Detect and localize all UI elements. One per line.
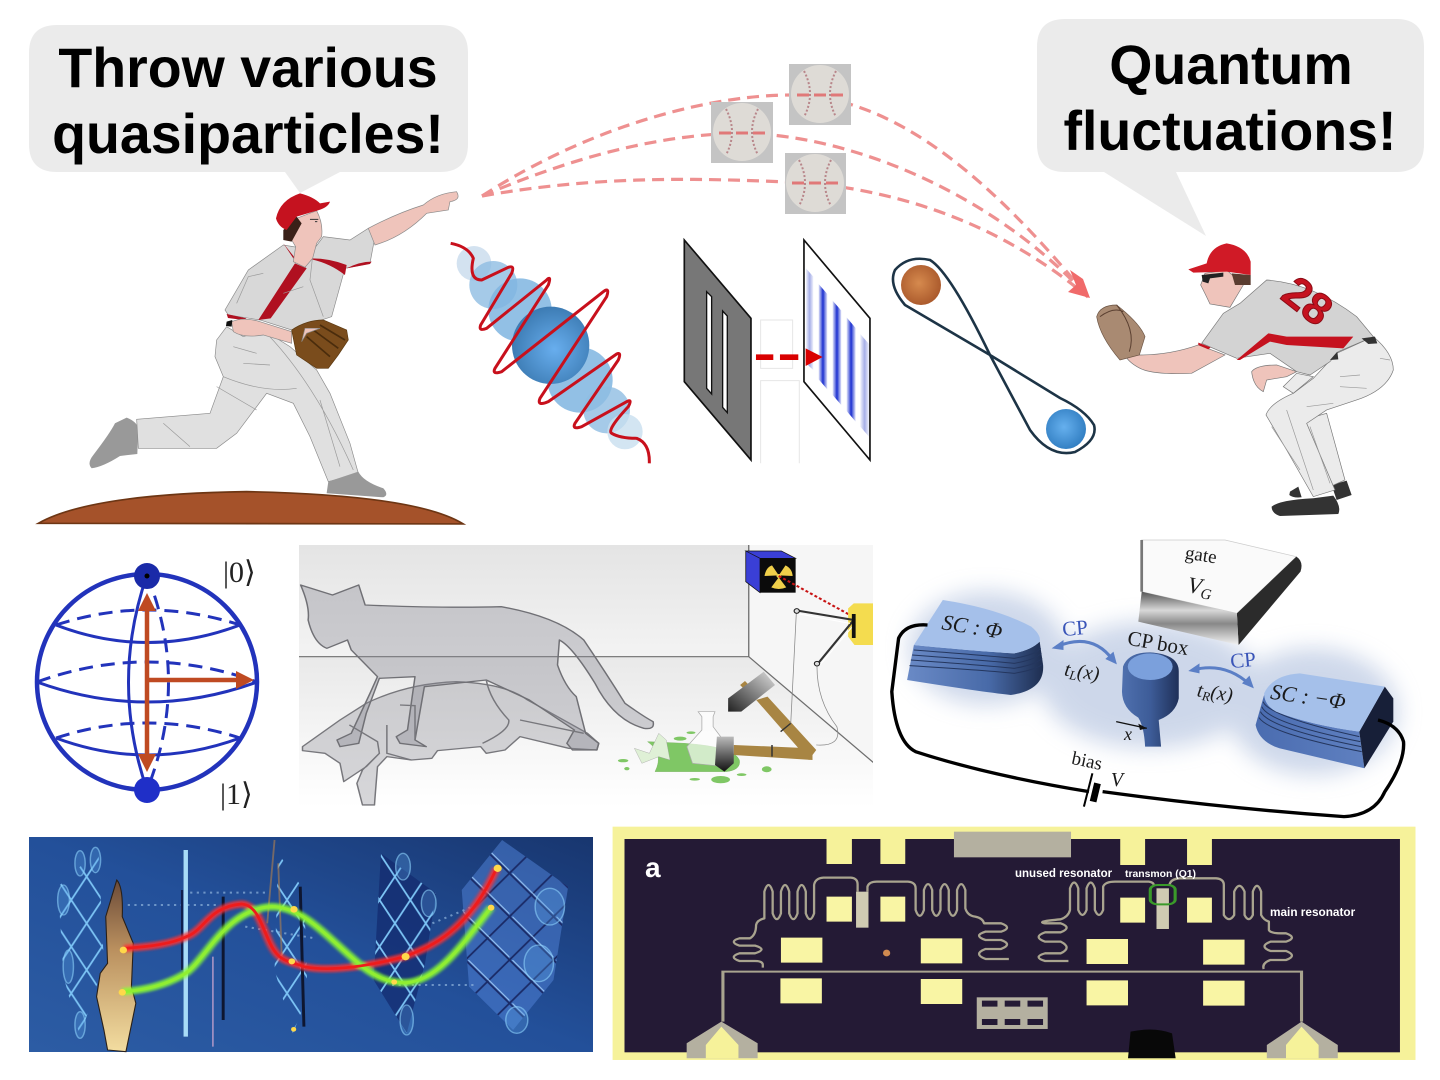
bond tabs (827, 832, 1212, 865)
CP box island (1116, 652, 1179, 747)
gate electrode (1138, 540, 1302, 645)
cat inner lines (349, 680, 584, 760)
pitcher figure (90, 192, 458, 497)
Bloch sphere (37, 556, 257, 811)
diagram labels: SC : Φ (940, 609, 1004, 644)
transmon chip micrograph (613, 827, 1415, 1060)
lattice lobes (58, 847, 564, 1038)
diagram labels: V (1186, 572, 1204, 599)
diagram labels (940, 543, 1348, 791)
Cooper pair box diagram (892, 540, 1404, 817)
speech bubble: throw various quasiparticles: quasiparticles! (52, 103, 444, 165)
diagram labels: CP (1061, 615, 1089, 641)
diagram labels: t (1063, 658, 1072, 681)
figure-eight trajectory with two balls (893, 259, 1095, 453)
diagram labels: R (1200, 688, 1211, 704)
meander resonators (734, 878, 1292, 969)
red wave (451, 243, 649, 463)
feedline (723, 972, 1302, 1022)
center test structure (977, 997, 1048, 1029)
Bloch sphere: |0⟩ (223, 556, 256, 589)
mound (38, 492, 463, 524)
dust spot (883, 950, 890, 956)
baseball 1 (789, 64, 851, 125)
hammer (734, 681, 816, 760)
gold plate (97, 880, 136, 1052)
dashed throw trajectories with arrow (482, 95, 1090, 298)
speech bubble: quantum fluctuations: Quantum (1109, 34, 1353, 96)
diagram labels: (x) (1209, 681, 1235, 707)
speech bubble: quantum fluctuations (1037, 19, 1424, 236)
chip labels: a (645, 852, 661, 883)
room lines (299, 545, 876, 765)
diagram labels: G (1199, 586, 1213, 604)
lying cat (302, 682, 599, 805)
interference screen (804, 240, 870, 460)
right superconductor (1256, 673, 1393, 768)
blue glow (909, 592, 1398, 775)
baseball 3 (785, 153, 846, 214)
pitcher on mound (38, 192, 463, 524)
chip labels (645, 852, 1356, 919)
green marker (1150, 885, 1175, 904)
speech bubble: throw various quasiparticles (29, 25, 468, 193)
coupling pads (780, 897, 1245, 1006)
radioactive box (746, 551, 796, 593)
green path (122, 907, 491, 992)
diagram labels: L (1067, 667, 1078, 683)
neon qubit paths through lattices (29, 837, 593, 1052)
diagram labels: gate (1184, 543, 1218, 568)
speech bubble: throw various quasiparticles: Throw various (58, 37, 438, 99)
glow (122, 868, 497, 992)
diagram labels: (x) (1076, 660, 1101, 686)
diagram labels: CP (1229, 647, 1257, 673)
glowing nodes (119, 865, 502, 1032)
diagram labels: bias (1070, 748, 1104, 775)
tunneling arrows (1057, 641, 1249, 684)
catcher: 28 (1273, 267, 1342, 336)
red path (124, 868, 497, 969)
diagram labels: CP box (1126, 626, 1191, 660)
detector and lever (848, 603, 873, 645)
chip labels: unused resonator (1015, 868, 1113, 880)
label plate (954, 832, 1071, 857)
red dashed arrow (756, 348, 823, 366)
wave packet with spheres (451, 243, 649, 463)
slit plate (684, 240, 751, 460)
chip labels: main resonator (1270, 905, 1356, 919)
right wall shade (750, 545, 873, 690)
speech bubble: quantum fluctuations: fluctuations! (1064, 100, 1396, 162)
circuit wire (892, 625, 1404, 817)
battery (1084, 773, 1092, 807)
diagram labels: x (1123, 724, 1132, 744)
transmon strips (856, 892, 868, 928)
catcher (1097, 243, 1393, 516)
baseball 2 (711, 102, 773, 163)
dotted tick rows (128, 893, 476, 985)
edge-on plates (180, 850, 192, 1037)
launch pads (687, 1022, 1338, 1058)
diagram labels: V (1111, 769, 1126, 791)
left superconductor (907, 600, 1043, 695)
spilled poison (648, 742, 740, 772)
flask (686, 711, 721, 766)
Bloch sphere: |1⟩ (220, 778, 253, 811)
lattice plates (58, 840, 568, 1037)
diagram labels: t (1196, 679, 1205, 702)
faint boxes (761, 320, 799, 463)
Schrodinger cat panel (299, 545, 877, 807)
standing cat (301, 585, 653, 750)
dark debris (1128, 1030, 1176, 1058)
chip labels: transmon (Q1) (1125, 869, 1196, 880)
diagram labels: SC : −Φ (1269, 679, 1348, 714)
double slit experiment (684, 240, 870, 463)
